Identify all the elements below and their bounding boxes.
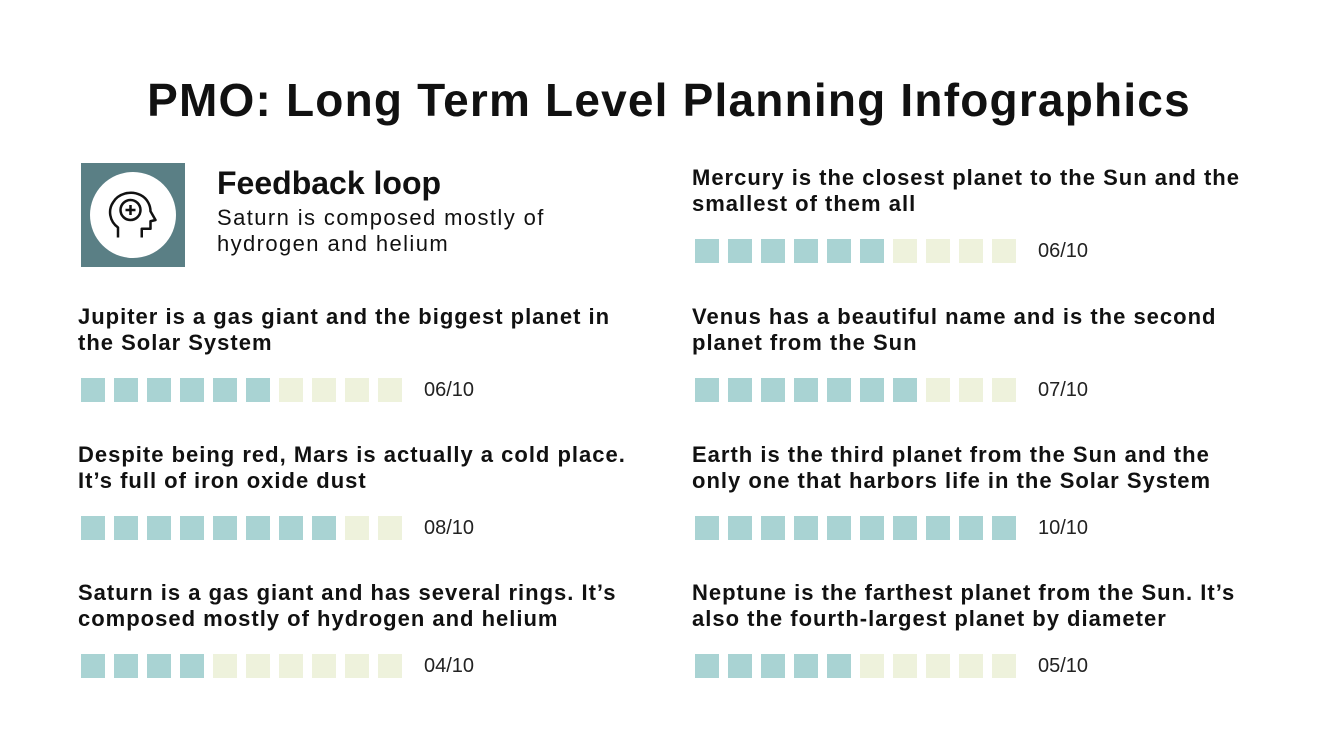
feedback text <box>217 205 545 256</box>
item: venus: Venus has a beautiful name and is the second <box>692 304 1216 329</box>
item: jupiter: 06/10 <box>424 378 474 400</box>
item: neptune <box>692 580 1235 678</box>
feedback text: Saturn is composed mostly of <box>217 205 545 230</box>
item: neptune: 05/10 <box>1038 654 1088 676</box>
item: venus: planet from the Sun <box>692 330 918 355</box>
item: mercury: 06/10 <box>1038 240 1088 262</box>
item: venus <box>692 304 1216 402</box>
item: earth: 10/10 <box>1038 516 1088 538</box>
title: PMO: Long Term Level Planning Infographics <box>147 74 1191 126</box>
item: mercury <box>692 165 1240 263</box>
item: mars: It’s full of iron oxide dust <box>78 468 367 493</box>
feedback text: hydrogen and helium <box>217 231 449 256</box>
icon: head in square <box>81 163 185 267</box>
feedback heading: Feedback loop <box>217 165 441 201</box>
item: mercury: Mercury is the closest planet to the Sun and the <box>692 165 1240 190</box>
item: neptune: Neptune is the farthest planet from the Sun. It’s <box>692 580 1235 605</box>
item: mercury: smallest of them all <box>692 191 916 216</box>
item: saturn: composed mostly of hydrogen and helium <box>78 606 558 631</box>
item: venus: 07/10 <box>1038 378 1088 400</box>
item: jupiter <box>78 304 610 402</box>
item: mars: 08/10 <box>424 516 474 538</box>
panel: feedback loop <box>81 163 545 267</box>
item: saturn: Saturn is a gas giant and has several rings. It’s <box>78 580 616 605</box>
item: earth: only one that harbors life in the Solar System <box>692 468 1211 493</box>
item: mars <box>78 442 626 540</box>
item: saturn <box>78 580 616 678</box>
item: earth <box>692 442 1211 540</box>
item: neptune: also the fourth-largest planet by diameter <box>692 606 1167 631</box>
item: jupiter: Jupiter is a gas giant and the biggest planet in <box>78 304 610 329</box>
item: saturn: 04/10 <box>424 654 474 676</box>
item: jupiter: the Solar System <box>78 330 273 355</box>
item: mars: Despite being red, Mars is actually a cold place. <box>78 442 626 467</box>
item: earth: Earth is the third planet from the Sun and the <box>692 442 1210 467</box>
